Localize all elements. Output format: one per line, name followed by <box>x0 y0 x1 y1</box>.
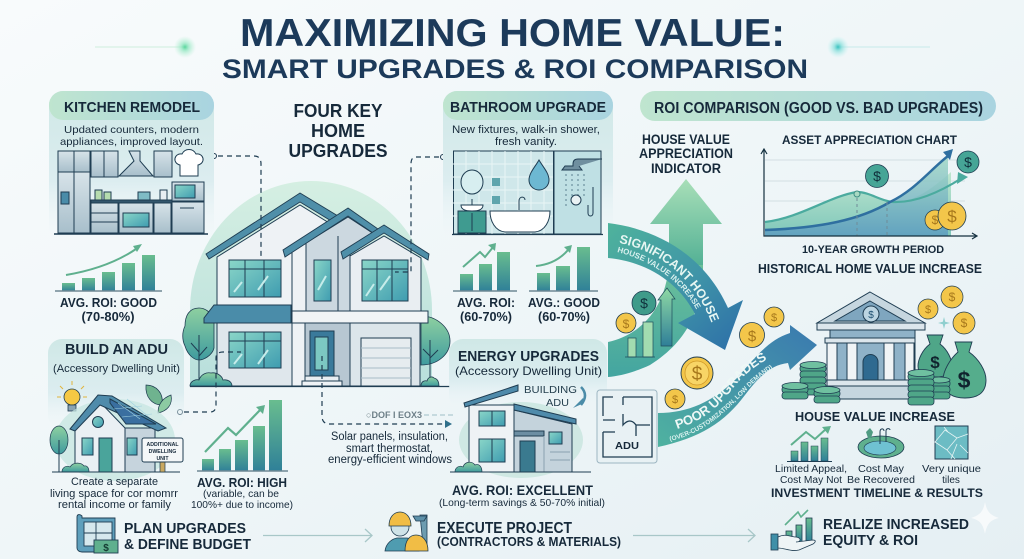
coin <box>957 151 979 173</box>
coin: $ <box>748 328 757 345</box>
indicator heading: APPRECIATION <box>639 146 733 161</box>
money bags: $ <box>958 367 971 393</box>
ROI label <box>439 482 605 509</box>
ROI label: AVG. ROI: GOOD <box>60 295 157 310</box>
heading pill <box>640 91 996 121</box>
description: Solar panels, insulation, <box>331 431 448 443</box>
ROI bar chart <box>197 400 288 471</box>
coin <box>866 164 888 188</box>
coin: $ <box>640 295 648 311</box>
building ADU label: BUILDING <box>524 384 577 396</box>
energy bush <box>455 462 482 472</box>
money bags: $ <box>930 353 940 372</box>
coin: $ <box>623 317 630 331</box>
description <box>60 124 203 148</box>
band text: (OVER-CUSTOMIZATION, LOW DEMAND) <box>670 364 772 442</box>
icon: plans and budget <box>77 515 118 554</box>
kitchen illustration <box>54 150 208 234</box>
step two label: EXECUTE PROJECT <box>437 520 572 537</box>
panel: ROI comparison <box>596 91 996 500</box>
ROI label: AVG. ROI: EXCELLENT <box>452 482 593 498</box>
house backdrop <box>459 402 583 478</box>
chart caption: HISTORICAL HOME VALUE INCREASE <box>758 262 982 276</box>
ROI bar chart two <box>529 245 598 291</box>
growth swoosh <box>608 265 703 377</box>
ADU backdrop <box>55 399 175 481</box>
panel: energy upgrades <box>328 339 607 509</box>
heading: four key home upgrades <box>288 101 388 161</box>
ROI label two: (60-70%) <box>538 309 590 324</box>
left tree <box>183 308 214 386</box>
mini bars with arrow <box>625 288 675 357</box>
icon: tiles <box>935 426 968 459</box>
ROI label two: AVG.: GOOD <box>528 295 600 310</box>
coin: $ <box>873 168 881 184</box>
icon: leaves <box>146 385 171 413</box>
caption: cost recovery: Be Recovered <box>847 475 915 486</box>
icon: light bulb <box>57 381 87 411</box>
front door <box>310 331 334 377</box>
step one label: & DEFINE BUDGET <box>124 537 251 553</box>
ADU bush <box>62 463 89 472</box>
caption: cost recovery <box>847 464 915 486</box>
description: smart thermostat, <box>346 443 433 455</box>
upper right window <box>362 260 408 301</box>
connector: ADU to house <box>178 352 241 414</box>
title: SMART UPGRADES & ROI COMPARISON <box>222 54 808 84</box>
sign: additional dwelling unit <box>142 438 183 472</box>
step two label <box>437 520 621 549</box>
heading: four key home upgrades: UPGRADES <box>288 141 388 161</box>
ROI label: AVG. ROI: HIGH <box>197 475 287 490</box>
garbled connector label: ○DOF I EOX3 <box>366 410 422 420</box>
description <box>328 431 452 466</box>
left bush <box>190 373 232 386</box>
description: appliances, improved layout. <box>60 136 203 148</box>
right tree <box>421 316 450 386</box>
description: Updated counters, modern <box>64 124 199 136</box>
chart axis label: 10-YEAR GROWTH PERIOD <box>802 244 944 256</box>
ROI label: (70-80%) <box>82 309 134 324</box>
coin <box>938 202 966 230</box>
step three label <box>823 517 969 549</box>
ROI bar chart one <box>453 243 517 291</box>
panel: central house <box>183 181 450 386</box>
decorative title glow right <box>827 36 930 58</box>
heading pill <box>49 91 214 120</box>
step one label <box>124 521 251 553</box>
coin <box>665 389 685 409</box>
heading: ENERGY UPGRADES <box>458 348 599 365</box>
description: Create a separate <box>71 476 158 488</box>
ROI label one: (60-70%) <box>460 309 512 324</box>
icon: hand with growth <box>771 510 815 551</box>
sparkle <box>938 317 950 329</box>
sign: additional dwelling unit: ADDITIONAL <box>146 442 179 448</box>
caption: limited appeal: Cost May Not <box>780 475 842 486</box>
heading pill: ROI COMPARISON (GOOD VS. BAD UPGRADES) <box>654 100 983 117</box>
ROI label: 100%+ due to income) <box>191 499 293 511</box>
band text: SIGNIFICANT HOUSE <box>620 235 720 322</box>
icon: plans and budget: $ <box>103 543 109 554</box>
title <box>222 12 808 84</box>
title: MAXIMIZING HOME VALUE: <box>240 12 785 55</box>
heading pill <box>443 91 613 120</box>
ROI bar chart <box>55 244 162 291</box>
arrow: step one to two <box>263 529 372 542</box>
panel: build an ADU <box>48 339 293 511</box>
caption: unique tiles: Very unique <box>922 464 981 475</box>
upper left window <box>229 260 281 297</box>
upper middle window <box>314 260 331 301</box>
connector: kitchen to house <box>212 154 261 258</box>
ADU house <box>70 395 166 472</box>
arrow: significant house value increase <box>608 223 743 350</box>
coin: $ <box>771 312 777 324</box>
coin <box>740 322 764 348</box>
heading pill: BATHROOM UPGRADE <box>450 99 606 116</box>
caption: cost recovery: Cost May <box>858 464 904 475</box>
ground line <box>190 386 450 388</box>
arrow: building ADU <box>573 387 585 408</box>
lower left window <box>229 332 281 368</box>
arrow: poor upgrades <box>658 325 817 447</box>
heading: BUILD AN ADU <box>65 341 168 358</box>
bank caption: HOUSE VALUE INCREASE <box>795 409 955 424</box>
house backdrop dome <box>190 181 432 386</box>
connector: energy to house <box>322 356 455 428</box>
coin: $ <box>672 394 678 406</box>
ROI label <box>191 475 293 511</box>
ROI label: (variable, can be <box>203 488 279 500</box>
panel background <box>48 339 184 429</box>
coin: $ <box>964 154 972 170</box>
chart heading: ASSET APPRECIATION CHART <box>782 133 958 147</box>
caption: unique tiles <box>922 464 981 486</box>
coin: $ <box>949 290 956 304</box>
subheading: (Accessory Dwelling Unit) <box>455 364 602 378</box>
porch awning <box>204 305 291 323</box>
ADU floor plan <box>597 390 657 463</box>
description: rental income or family <box>58 499 172 511</box>
description: energy-efficient windows <box>328 454 452 466</box>
panel: kitchen remodel <box>49 91 214 324</box>
arrow: step two to three <box>633 529 755 542</box>
caption: limited appeal <box>775 464 847 486</box>
panel background <box>449 339 607 409</box>
icon: pool <box>858 428 904 458</box>
subheading: (Accessory Dwelling Unit) <box>53 363 180 375</box>
ADU floor plan: ADU <box>615 441 639 452</box>
ground line <box>450 471 591 473</box>
indicator heading <box>639 132 733 176</box>
energy house <box>464 385 576 472</box>
sign: additional dwelling unit: UNIT <box>156 456 169 462</box>
right bush <box>421 377 439 386</box>
coin <box>941 286 963 308</box>
step three label: REALIZE INCREASED <box>823 517 969 533</box>
description: New fixtures, walk-in shower, <box>452 124 600 136</box>
coin <box>681 357 713 389</box>
asset appreciation chart <box>761 149 977 239</box>
connector: bathroom to house <box>395 154 446 272</box>
coin stacks right <box>908 370 950 405</box>
icon: limited appeal chart <box>787 426 832 462</box>
ADU tree <box>50 426 68 472</box>
ROI label <box>60 295 157 324</box>
building ADU label <box>524 384 577 409</box>
coin <box>764 307 784 327</box>
caption: limited appeal: Limited Appeal, <box>775 464 847 475</box>
coin: $ <box>961 316 968 330</box>
coin <box>953 312 975 334</box>
section caption: INVESTMENT TIMELINE & RESULTS <box>771 486 983 500</box>
icon: contractor <box>385 512 428 551</box>
band text: HOUSE VALUE INCREASE <box>618 246 701 310</box>
icon: bank: $ <box>868 310 874 321</box>
ROI label two <box>528 295 600 324</box>
process strip <box>77 510 969 554</box>
porch steps <box>302 376 342 386</box>
heading: four key home upgrades: HOME <box>311 121 365 141</box>
coin <box>925 210 945 230</box>
panel: bathroom upgrade <box>443 91 613 324</box>
ROI label one: AVG. ROI: <box>457 295 515 310</box>
step two label: (CONTRACTORS & MATERIALS) <box>437 535 621 549</box>
coin <box>918 299 938 319</box>
bathroom illustration <box>452 151 603 234</box>
sign: additional dwelling unit: DWELLING <box>149 449 176 455</box>
description <box>452 124 600 148</box>
garage door <box>361 338 411 386</box>
ROI label one <box>457 295 515 324</box>
coin: $ <box>947 207 957 226</box>
coin <box>632 291 656 315</box>
description: living space for cor momrr <box>50 488 178 500</box>
heading pill: KITCHEN REMODEL <box>64 99 200 116</box>
coin: $ <box>925 304 931 316</box>
step three label: EQUITY & ROI <box>823 533 918 549</box>
indicator heading: INDICATOR <box>651 161 721 176</box>
sparkle decoration <box>971 502 999 534</box>
panel background <box>49 91 214 241</box>
building ADU label: ADU <box>546 397 569 409</box>
money bags <box>918 335 986 398</box>
roofs <box>206 193 429 260</box>
decorative title glow left <box>95 36 196 58</box>
heading: four key home upgrades: FOUR KEY <box>294 101 382 121</box>
step one label: PLAN UPGRADES <box>124 521 246 537</box>
description <box>50 476 178 511</box>
band text: POOR UPGRADES <box>674 352 766 429</box>
coin stacks left <box>782 362 840 403</box>
coin: $ <box>692 364 703 385</box>
coin <box>616 313 636 333</box>
ROI label: (Long-term savings & 50-70% initial) <box>439 497 605 509</box>
panel background <box>443 91 613 241</box>
indicator heading: HOUSE VALUE <box>642 132 730 147</box>
icon: bank <box>817 292 925 399</box>
house walls <box>217 205 428 386</box>
description: fresh vanity. <box>495 136 557 148</box>
caption: unique tiles: tiles <box>942 475 960 486</box>
arrow: house value appreciation <box>650 179 722 280</box>
ground line <box>52 471 180 473</box>
coin: $ <box>932 213 939 227</box>
